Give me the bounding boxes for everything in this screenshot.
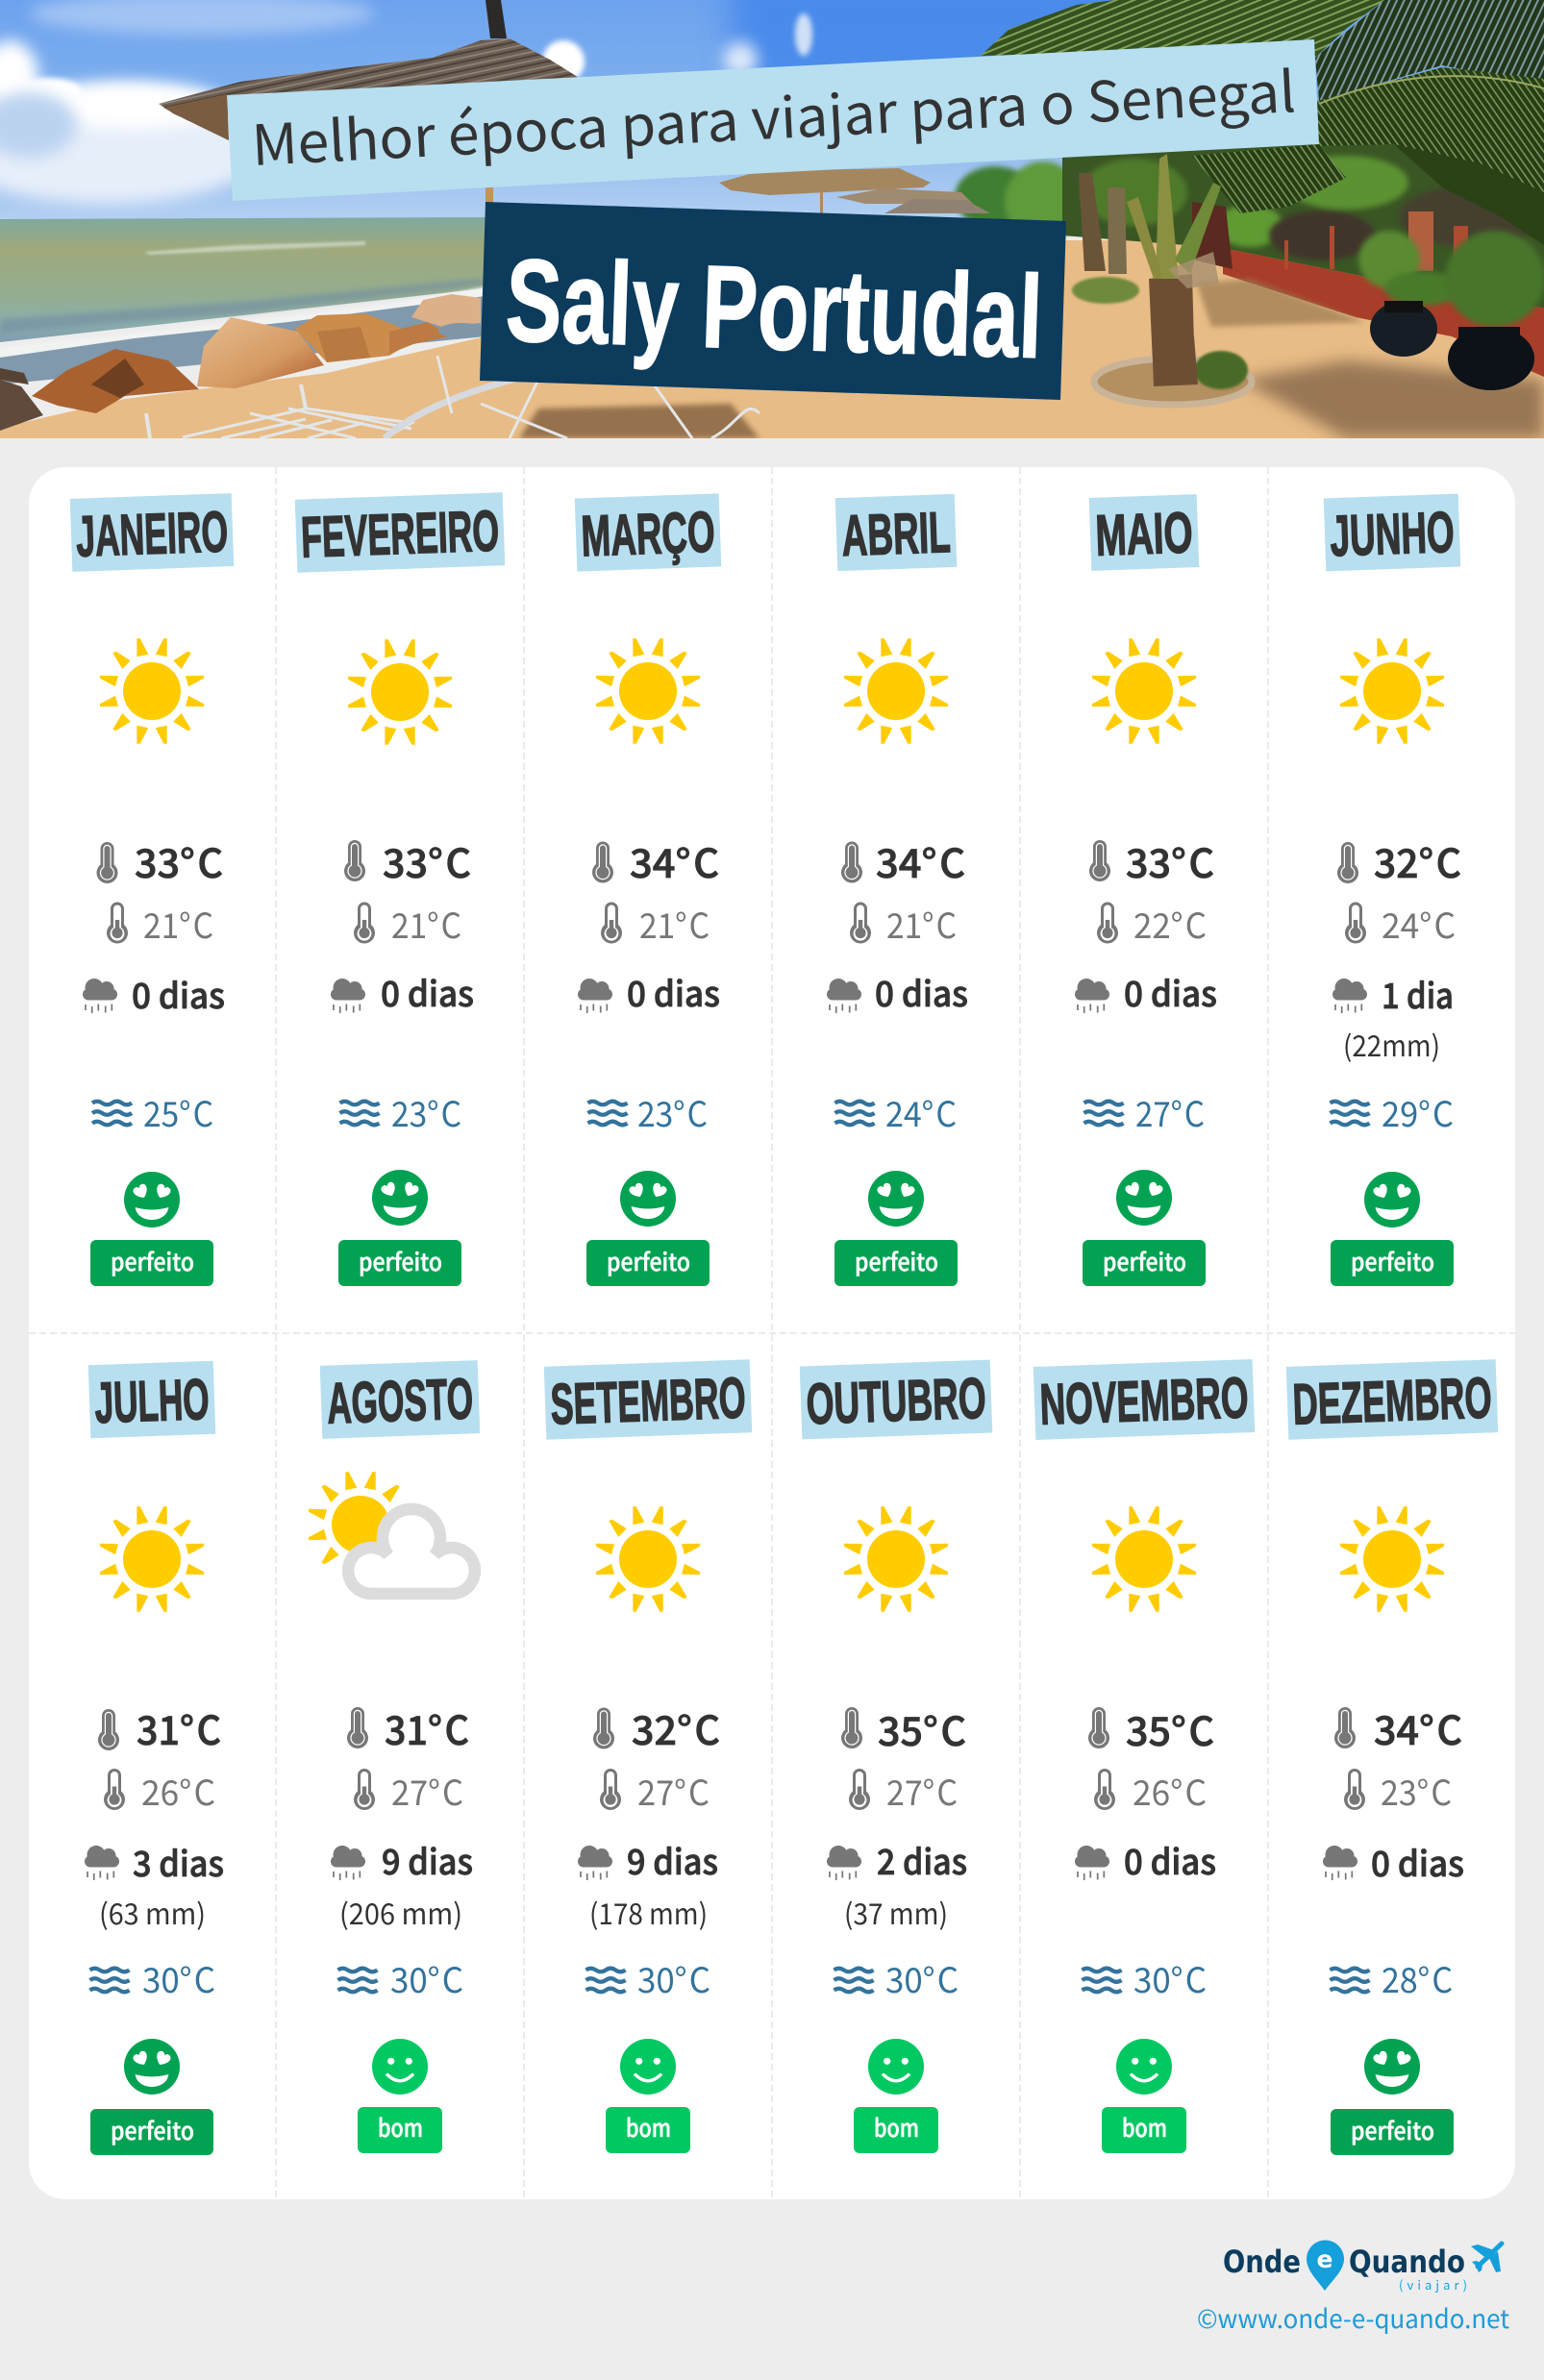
month tag: OUTUBRO [805, 1366, 987, 1436]
rain days [827, 1835, 967, 1885]
rain days [1332, 969, 1454, 1019]
min temperature [600, 1766, 710, 1816]
month: novembro [1033, 1359, 1255, 2153]
rainfall: (178 mm) [589, 1891, 708, 1933]
month tag: NOVEMBRO [1038, 1365, 1250, 1437]
icon: sun [100, 1506, 204, 1612]
min temperature [107, 899, 213, 949]
rating smiley [1116, 1170, 1172, 1226]
icon: location pin: e [1317, 2245, 1332, 2273]
icon: sun [348, 639, 452, 745]
rain days [1075, 1835, 1216, 1885]
rating smiley [868, 1171, 924, 1227]
min temperature [354, 1766, 463, 1816]
max temperature: 31° C [137, 1698, 221, 1756]
rating smiley [1364, 1172, 1420, 1227]
rating badge: bom [378, 2110, 423, 2144]
black pots [1370, 301, 1437, 357]
max temperature [344, 831, 471, 889]
rain days: 9 dias [382, 1835, 473, 1885]
icon: sun behind cloud [309, 1472, 475, 1594]
max temperature [96, 831, 223, 889]
month: setembro [544, 1359, 752, 2153]
icon: sun [596, 638, 700, 744]
month tag [88, 1361, 215, 1438]
min temperature [1097, 899, 1207, 949]
min temperature [849, 1766, 958, 1816]
icon: sun [1092, 638, 1196, 744]
central palm [1149, 274, 1194, 356]
rating badge: bom [626, 2110, 671, 2144]
month tag: ABRIL [840, 500, 952, 568]
icon: location pin [1307, 2240, 1344, 2291]
month tag: FEVEREIRO [300, 498, 500, 570]
month: junho [1324, 494, 1461, 1286]
rating badge: perfeito [607, 1244, 690, 1278]
footer logo [1223, 2240, 1502, 2293]
min temperature: 23° C [1381, 1766, 1452, 1816]
month: fevereiro [295, 492, 505, 1286]
rating smiley [620, 2039, 676, 2095]
sea temperature [1084, 1087, 1205, 1137]
rain days [578, 1835, 718, 1885]
rain days: 3 dias [133, 1837, 224, 1887]
month tag [1033, 1359, 1255, 1440]
rating smiley [124, 2039, 180, 2095]
min temperature: 24° C [1382, 899, 1456, 949]
logo tagline: (viajar) [1399, 2275, 1467, 2293]
rating smiley [1116, 2039, 1172, 2095]
max temperature [1334, 1698, 1462, 1756]
sea temperature [1331, 1087, 1454, 1137]
sea temperature [834, 1087, 957, 1137]
sea temperature [92, 1087, 213, 1137]
sea temperature [338, 1953, 463, 2003]
red wall [1223, 248, 1544, 377]
icon: sun [1092, 1506, 1196, 1612]
month tag: JULHO [93, 1367, 211, 1435]
month tag: SETEMBRO [549, 1365, 747, 1437]
max temperature [593, 1698, 720, 1756]
palm fronds and hedge [1062, 135, 1544, 312]
min temperature [354, 899, 461, 949]
rating badge: perfeito [111, 2113, 194, 2147]
max temperature: 32° C [632, 1698, 720, 1756]
rocks [32, 349, 199, 413]
min temperature: 21° C [391, 899, 461, 949]
rainfall: (37 mm) [844, 1891, 948, 1933]
month tag: MAIO [1094, 500, 1194, 568]
rain days [1075, 967, 1217, 1017]
month tag: AGOSTO [326, 1366, 474, 1436]
rating smiley [1364, 2039, 1420, 2095]
small umbrellas [719, 168, 931, 195]
icon: sun [844, 638, 948, 744]
month tag [70, 493, 234, 572]
sea temperature [90, 1953, 215, 2003]
logo word: Quando: Quando [1349, 2244, 1465, 2280]
month tag: JANEIRO [75, 499, 229, 569]
rating badge [90, 1240, 213, 1286]
min temperature: 26° C [1133, 1766, 1207, 1816]
max temperature: 34° C [630, 831, 719, 889]
rain days: 0 dias [132, 969, 225, 1019]
sea temperature: 28° C [1382, 1953, 1453, 2003]
rating badge [854, 2107, 938, 2153]
sea temperature: 25° C [143, 1087, 213, 1137]
sea temperature: 24° C [885, 1087, 957, 1137]
rating badge [1102, 2107, 1186, 2153]
rating badge [90, 2109, 213, 2155]
max temperature [592, 831, 719, 889]
rain days: 1 dia [1382, 969, 1454, 1019]
sea temperature: 23° C [637, 1087, 708, 1137]
month: abril [827, 494, 968, 1286]
sea temperature [1083, 1953, 1207, 2003]
rain days [85, 1837, 224, 1887]
icon: sun [1340, 638, 1444, 744]
month tag [1089, 494, 1199, 571]
rain days: 0 dias [381, 967, 474, 1017]
month tag [320, 1360, 480, 1439]
sea temperature: 30° C [1133, 1953, 1207, 2003]
rating badge [358, 2107, 442, 2153]
sand foreground [0, 240, 1544, 438]
sea temperature: 30° C [637, 1953, 710, 2003]
rainfall: (22mm) [1343, 1023, 1440, 1065]
title band: place name: Saly Portudal [504, 235, 1044, 383]
sea temperature: 23° C [391, 1087, 461, 1137]
month: dezembro [1286, 1359, 1498, 2155]
thatched umbrella [159, 38, 581, 140]
max temperature: 33° C [1126, 831, 1214, 889]
rain days [331, 1835, 473, 1885]
rain days: 9 dias [627, 1835, 718, 1885]
min temperature: 21° C [886, 899, 957, 949]
website credit: ©www.onde-e-quando.net [1197, 2298, 1509, 2336]
max temperature: 33° C [135, 831, 223, 889]
rating smiley [372, 2039, 428, 2095]
rating badge [1083, 1240, 1206, 1286]
min temperature [1344, 1766, 1452, 1816]
rain days: 0 dias [627, 967, 720, 1017]
sea temperature: 29° C [1382, 1087, 1454, 1137]
rain days [331, 967, 474, 1017]
sea temperature: 30° C [885, 1953, 959, 2003]
palm trunks [1079, 173, 1106, 271]
min temperature: 21° C [143, 899, 213, 949]
rating badge: perfeito [1351, 2113, 1434, 2147]
min temperature: 26° C [141, 1766, 215, 1816]
icon: sun [1340, 1506, 1444, 1612]
sea temperature [1331, 1953, 1453, 2003]
planter ring [1094, 359, 1252, 405]
rain days: 0 dias [875, 967, 968, 1017]
min temperature: 21° C [639, 899, 710, 949]
icon: sun [844, 1506, 948, 1612]
rating badge: bom [874, 2110, 919, 2144]
max temperature [1088, 1699, 1214, 1757]
rain days: 2 dias [877, 1835, 967, 1885]
lounge chair shadow [519, 404, 760, 438]
rating badge [586, 1240, 710, 1286]
logo word: Onde: Onde [1223, 2244, 1301, 2280]
month tag [544, 1359, 752, 1440]
max temperature: 31° C [385, 1698, 469, 1756]
max temperature: 34° C [876, 831, 965, 889]
month: outubro [800, 1360, 992, 2153]
rain days: 0 dias [1371, 1837, 1464, 1887]
sea temperature: 30° C [390, 1953, 463, 2003]
max temperature [347, 1698, 469, 1756]
rating badge: perfeito [855, 1244, 938, 1278]
max temperature: 32° C [1374, 831, 1461, 889]
month: julho [85, 1361, 224, 2155]
min temperature [1345, 899, 1456, 949]
rating smiley [372, 1170, 428, 1226]
sea temperature: 27° C [1135, 1087, 1205, 1137]
month tag [575, 493, 721, 572]
min temperature [104, 1766, 215, 1816]
month: agosto [309, 1360, 480, 2153]
rainfall: (206 mm) [339, 1891, 462, 1933]
rating smiley [868, 2039, 924, 2095]
pot plants [1358, 231, 1420, 288]
month tag [800, 1360, 992, 1439]
max temperature [98, 1698, 221, 1756]
sea temperature: 30° C [142, 1953, 215, 2003]
sea temperature [588, 1087, 708, 1137]
rain days [83, 969, 225, 1019]
rating badge [338, 1240, 461, 1286]
month: maio [1075, 494, 1217, 1286]
header beach photo [0, 0, 1544, 438]
min temperature [1094, 1766, 1207, 1816]
white calendar panel [29, 467, 1515, 2199]
min temperature: 27° C [391, 1766, 463, 1816]
title band: subtitle: Melhor época para viajar para o Senegal [250, 47, 1297, 182]
icon: airplane [1471, 2244, 1502, 2272]
rating badge: perfeito [111, 1244, 194, 1278]
max temperature: 35° C [1126, 1699, 1214, 1757]
lounge chairs [146, 356, 760, 438]
icon: sun [596, 1506, 700, 1612]
max temperature: 34° C [1374, 1698, 1462, 1756]
min temperature: 27° C [637, 1766, 710, 1816]
rating smiley [620, 1171, 676, 1227]
month tag: JUNHO [1329, 500, 1456, 568]
rating badge [1331, 1240, 1454, 1286]
rain days [578, 967, 720, 1017]
sea temperature [834, 1953, 959, 2003]
distant trees [951, 161, 1021, 219]
min temperature: 27° C [886, 1766, 958, 1816]
month tag [295, 492, 505, 573]
month tag [835, 494, 957, 571]
sea temperature [586, 1953, 710, 2003]
title band: place name [480, 202, 1066, 400]
max temperature: 35° C [878, 1699, 966, 1757]
max temperature: 33° C [383, 831, 471, 889]
rating smiley [124, 1172, 180, 1227]
rating badge [606, 2107, 690, 2153]
min temperature [601, 899, 710, 949]
sea temperature [340, 1087, 461, 1137]
min temperature: 22° C [1133, 899, 1207, 949]
icon: sun [100, 638, 204, 744]
rating badge [834, 1240, 958, 1286]
rating badge [1331, 2109, 1454, 2155]
rating badge: perfeito [1351, 1244, 1434, 1278]
rain days: 0 dias [1124, 967, 1217, 1017]
month: janeiro [70, 493, 234, 1286]
rain days [827, 967, 968, 1017]
month tag [1324, 494, 1460, 571]
rating badge: perfeito [1103, 1244, 1186, 1278]
rain days: 0 dias [1124, 1835, 1216, 1885]
month: março [575, 493, 721, 1286]
rating badge: perfeito [359, 1244, 442, 1278]
min temperature [850, 899, 957, 949]
ground shadows [1197, 279, 1365, 327]
rain days [1323, 1837, 1464, 1887]
rainfall: (63 mm) [99, 1891, 206, 1933]
rating badge: bom [1122, 2110, 1167, 2144]
month tag: MARÇO [580, 500, 716, 568]
